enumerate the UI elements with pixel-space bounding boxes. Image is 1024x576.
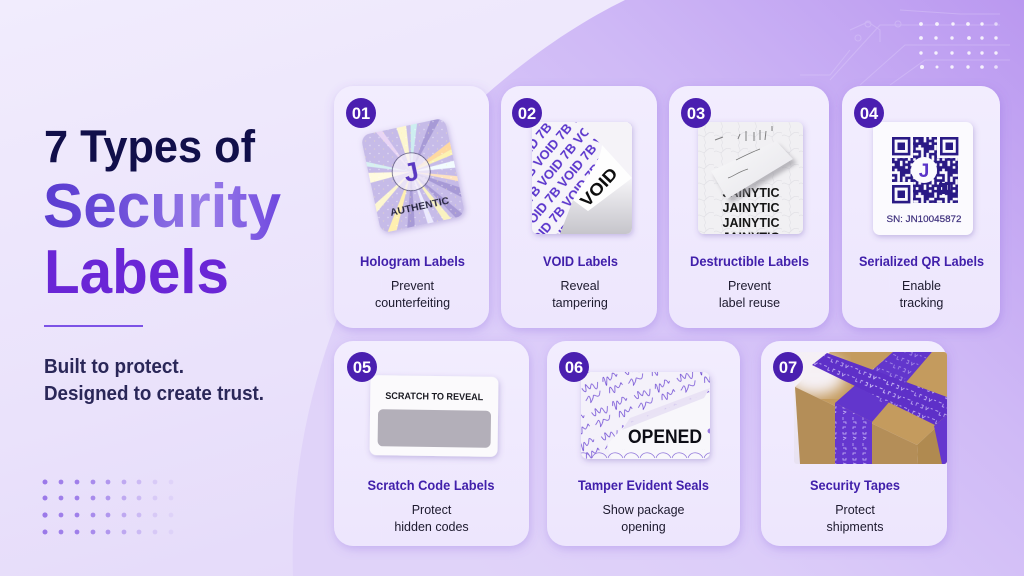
dot grid top right	[919, 22, 998, 69]
icon: destructible sticker: JAINYTIC	[722, 200, 780, 215]
title: 7 Types of	[44, 121, 256, 172]
description: label reuse	[719, 296, 780, 310]
icon: void sticker	[530, 122, 636, 238]
icon: void sticker: VOID 7B VOID 7B VOID 7B VOID	[548, 112, 687, 273]
icon: void sticker: 7B VOID 7B VOID 7B VOID 7B V	[481, 68, 619, 228]
description: opening	[621, 520, 666, 534]
icon: void sticker: VOID 7B VOID 7B VOID 7B VOID	[474, 50, 613, 212]
icon: hologram sticker: J	[401, 156, 421, 188]
icon: destructible sticker: JAINYTIC	[722, 185, 780, 200]
description: shipments	[827, 520, 883, 534]
description: Protect	[835, 503, 875, 517]
icon: scratch label: SCRATCH TO REVEAL	[385, 391, 484, 403]
circuit pattern top right	[800, 10, 1010, 85]
description: counterfeiting	[375, 296, 450, 310]
icon: void sticker: VOID	[576, 164, 622, 211]
badge 01	[346, 98, 376, 128]
description	[394, 503, 469, 534]
icon: tamper seal: OPENED	[628, 427, 702, 448]
icon: qr sticker	[873, 122, 973, 235]
badge 07	[773, 352, 803, 382]
panel: tamper evident seals	[547, 341, 740, 546]
description: Reveal	[561, 279, 599, 293]
title: Security	[43, 172, 282, 241]
icon: destructible sticker: JAINYTIC	[722, 230, 780, 244]
icon: taped box	[785, 352, 947, 464]
description	[827, 503, 883, 534]
description: Prevent	[728, 279, 772, 293]
panel: scratch code labels	[334, 341, 529, 546]
description: Protect	[412, 503, 452, 517]
description: Show package	[602, 503, 685, 517]
badge 04: 04	[860, 105, 879, 123]
icon: void sticker: 7B VOID 7B VOID 7B VOID 7B V	[530, 109, 668, 269]
subtitle: Built to protect.	[44, 356, 184, 378]
heading: Scratch Code Labels	[368, 478, 494, 493]
badge 06	[559, 352, 589, 382]
dot grid bottom left	[42, 480, 173, 534]
description	[719, 279, 780, 310]
description: tampering	[552, 296, 608, 310]
description: tracking	[900, 296, 943, 310]
badge 05	[347, 352, 377, 382]
title divider	[44, 325, 143, 327]
icon: void sticker: 7B VOID 7B VOID 7B VOID 7B V	[506, 89, 643, 249]
icon: destructible sticker	[698, 122, 803, 244]
heading: Hologram Labels	[360, 254, 465, 269]
icon: qr sticker: J	[919, 161, 929, 182]
title: Labels	[44, 238, 229, 307]
heading: VOID Labels	[543, 254, 618, 269]
subtitle: Designed to create trust.	[44, 383, 264, 405]
badge 07: 07	[779, 359, 797, 377]
icon: tamper seal	[581, 372, 712, 459]
subtitle	[44, 356, 264, 405]
title	[43, 121, 282, 307]
panel: hologram labels	[328, 86, 494, 328]
description	[602, 503, 685, 534]
badge 03	[681, 98, 711, 128]
icon: hologram sticker	[362, 118, 468, 236]
panel: serialized qr labels	[842, 86, 1000, 328]
badge 02	[512, 98, 542, 128]
icon: destructible sticker: JAINYTIC	[722, 215, 780, 230]
badge 06: 06	[565, 359, 583, 377]
description	[552, 279, 608, 310]
icon: scratch label	[369, 375, 499, 457]
icon: void sticker: VOID 7B VOID 7B VOID 7B VOID	[523, 91, 662, 253]
badge 04	[854, 98, 884, 128]
badge 03: 03	[687, 105, 705, 123]
icon: qr sticker: SN: JN10045872	[886, 214, 962, 225]
panel: destructible labels	[669, 86, 829, 328]
badge 01: 01	[352, 105, 370, 123]
description: hidden codes	[394, 520, 469, 534]
icon: hologram sticker: AUTHENTIC	[389, 195, 451, 219]
description	[375, 279, 450, 310]
heading: Tamper Evident Seals	[578, 478, 709, 493]
description: Enable	[902, 279, 941, 293]
panel: void labels	[498, 86, 661, 334]
icon: void sticker: VOID 7B VOID 7B VOID 7B VOID	[499, 70, 638, 232]
heading: Security Tapes	[810, 478, 900, 493]
panel: security tapes	[761, 341, 947, 546]
badge 05: 05	[353, 359, 371, 377]
badge 02: 02	[518, 105, 536, 123]
heading: Destructible Labels	[690, 254, 809, 269]
description	[900, 279, 943, 310]
description: Prevent	[391, 279, 435, 293]
heading: Serialized QR Labels	[859, 254, 984, 269]
